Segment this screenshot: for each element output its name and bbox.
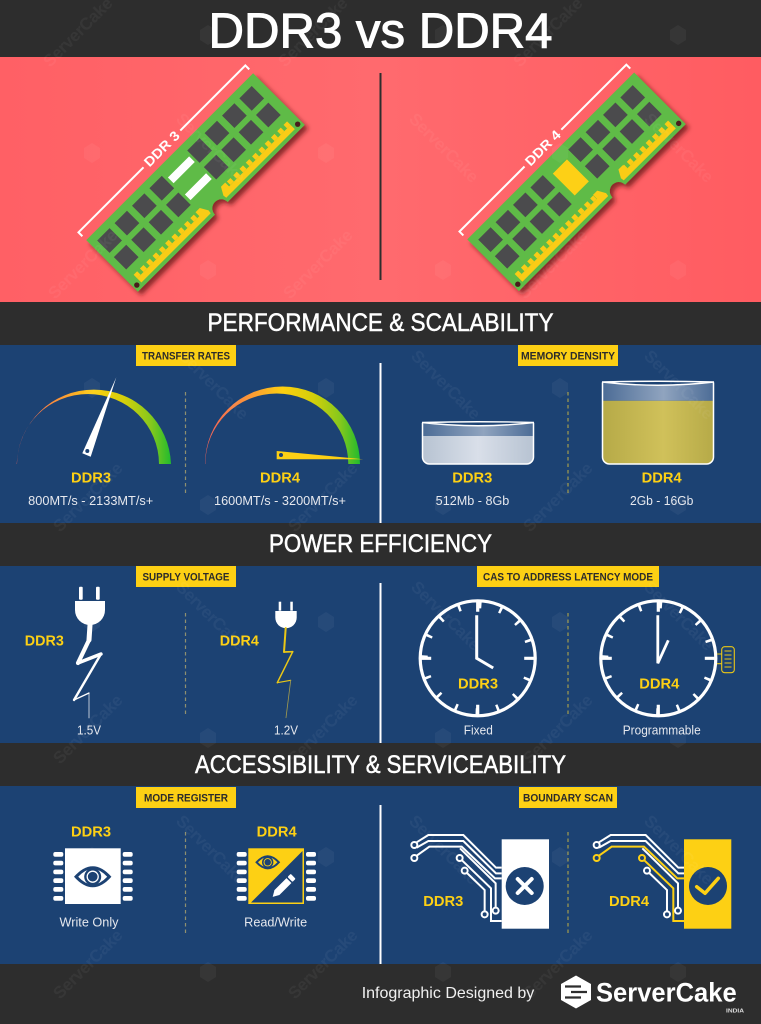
watermarks: ServerCake xyxy=(640,109,717,186)
watermarks: ServerCake xyxy=(172,109,249,186)
DDR4 RAM module: DDR 4 xyxy=(522,127,564,169)
title: DDR3 vs DDR4 xyxy=(208,4,552,58)
watermarks: ServerCake xyxy=(514,226,591,303)
label: boundary scan: BOUNDARY SCAN xyxy=(523,792,613,804)
beaker: DDR3 memory density: 512Mb - 8Gb xyxy=(436,494,509,508)
beaker: DDR4 memory density xyxy=(602,381,714,508)
watermarks: ServerCake xyxy=(640,811,717,888)
icon: DDR3 boundary scan chip with cross xyxy=(411,835,549,929)
watermarks: ServerCake xyxy=(640,577,717,654)
icon: DDR3 write only chip xyxy=(53,825,133,930)
label: mode register xyxy=(136,787,236,808)
label: transfer rates xyxy=(136,345,236,366)
beaker: DDR4 memory density: DDR4 xyxy=(642,471,682,487)
watermarks: ServerCake xyxy=(640,346,717,423)
icon: DDR4 plug and bolt 1.2V: DDR4 xyxy=(220,634,259,650)
panel: performance and scalability xyxy=(0,345,761,523)
label: mode register: MODE REGISTER xyxy=(144,792,228,804)
logo: ServerCake hexagon xyxy=(561,976,591,1008)
watermarks: ServerCake xyxy=(519,691,596,768)
beaker: DDR4 memory density: 2Gb - 16Gb xyxy=(630,494,693,508)
heading: accessibility and serviceability: ACCESSIBILITY & SERVICEABILITY xyxy=(195,751,566,779)
label: boundary scan xyxy=(519,787,617,808)
icon: DDR3 plug and bolt 1.5V: DDR3 xyxy=(25,634,64,650)
label: CAS to address latency mode xyxy=(477,566,659,587)
icon: DDR4 boundary scan chip with check: DDR4 xyxy=(609,894,649,910)
icon: DDR3 fixed clock: DDR3 xyxy=(458,676,498,692)
gauge: DDR3 transfer rate: 800MT/s - 2133MT/s+ xyxy=(28,494,153,508)
icon: DDR3 write only chip: DDR3 xyxy=(71,825,111,841)
icon: DDR4 programmable clock xyxy=(601,601,734,737)
heading: performance and scalability: PERFORMANCE & SCALABILITY xyxy=(208,309,554,337)
icon: DDR4 plug and bolt 1.2V: 1.2V xyxy=(274,723,299,737)
label: memory density xyxy=(518,345,618,366)
watermarks: ServerCake xyxy=(519,926,596,1003)
watermarks: ServerCake xyxy=(279,226,356,303)
watermarks: ServerCake xyxy=(405,109,482,186)
label: supply voltage xyxy=(136,566,236,587)
footer credit: ServerCake xyxy=(596,978,737,1008)
gauge: DDR4 transfer rate: 1600MT/s - 3200MT/s+ xyxy=(214,494,346,508)
footer credit: INDIA xyxy=(726,1009,744,1015)
icon: DDR4 read/write chip: Read/Write xyxy=(244,916,307,930)
watermarks: ServerCake xyxy=(172,577,249,654)
icon: DDR3 plug and bolt 1.5V: 1.5V xyxy=(77,723,102,737)
DDR3 RAM module: DDR 3 xyxy=(141,128,183,170)
footer credit: Infographic Designed by xyxy=(362,985,534,1002)
icon: DDR4 plug and bolt 1.2V xyxy=(220,602,299,737)
watermarks: ServerCake xyxy=(172,811,249,888)
watermarks: ServerCake xyxy=(49,459,126,536)
watermarks: ServerCake xyxy=(175,346,252,423)
watermarks: ServerCake xyxy=(284,459,361,536)
icon: DDR3 write only chip: Write Only xyxy=(60,916,119,930)
watermarks: ServerCake xyxy=(49,926,126,1003)
icon: DDR4 read/write chip xyxy=(237,825,316,930)
panel: accessibility and serviceability xyxy=(0,786,761,964)
label: CAS to address latency mode: CAS TO ADDRESS LATENCY MODE xyxy=(483,572,653,584)
icon: DDR4 programmable clock: Programmable xyxy=(623,723,701,737)
watermarks: ServerCake xyxy=(49,691,126,768)
label: memory density: MEMORY DENSITY xyxy=(521,350,616,362)
footer credit xyxy=(362,976,744,1015)
icon: DDR4 read/write chip: DDR4 xyxy=(257,825,297,841)
beaker: DDR3 memory density xyxy=(422,422,534,508)
icon: DDR3 fixed clock: Fixed xyxy=(464,723,493,737)
panel: power efficiency xyxy=(0,566,761,743)
label: transfer rates: TRANSFER RATES xyxy=(142,350,230,362)
gauge: DDR3 transfer rate xyxy=(17,377,171,508)
DDR3 RAM module xyxy=(73,60,305,292)
icon: DDR4 boundary scan chip with check xyxy=(594,835,731,929)
DDR4 RAM module xyxy=(454,59,686,291)
beaker: DDR3 memory density: DDR3 xyxy=(452,471,492,487)
watermarks: ServerCake xyxy=(407,577,484,654)
watermarks: ServerCake xyxy=(44,226,121,303)
heading: power efficiency: POWER EFFICIENCY xyxy=(269,530,492,558)
gauge: DDR4 transfer rate: DDR4 xyxy=(260,471,300,487)
gauge: DDR3 transfer rate: DDR3 xyxy=(71,471,111,487)
panel: RAM comparison xyxy=(0,57,761,302)
watermarks: ServerCake xyxy=(284,926,361,1003)
icon: DDR3 boundary scan chip with cross: DDR3 xyxy=(423,894,463,910)
watermarks: ServerCake xyxy=(407,346,484,423)
icon: DDR3 plug and bolt 1.5V xyxy=(25,587,105,737)
icon: DDR4 programmable clock: DDR4 xyxy=(639,676,679,692)
watermarks: ServerCake xyxy=(405,811,482,888)
watermarks: ServerCake xyxy=(284,691,361,768)
label: supply voltage: SUPPLY VOLTAGE xyxy=(142,572,230,584)
watermarks: ServerCake xyxy=(519,459,596,536)
icon: DDR3 fixed clock xyxy=(420,601,535,737)
gauge: DDR4 transfer rate xyxy=(205,386,363,508)
